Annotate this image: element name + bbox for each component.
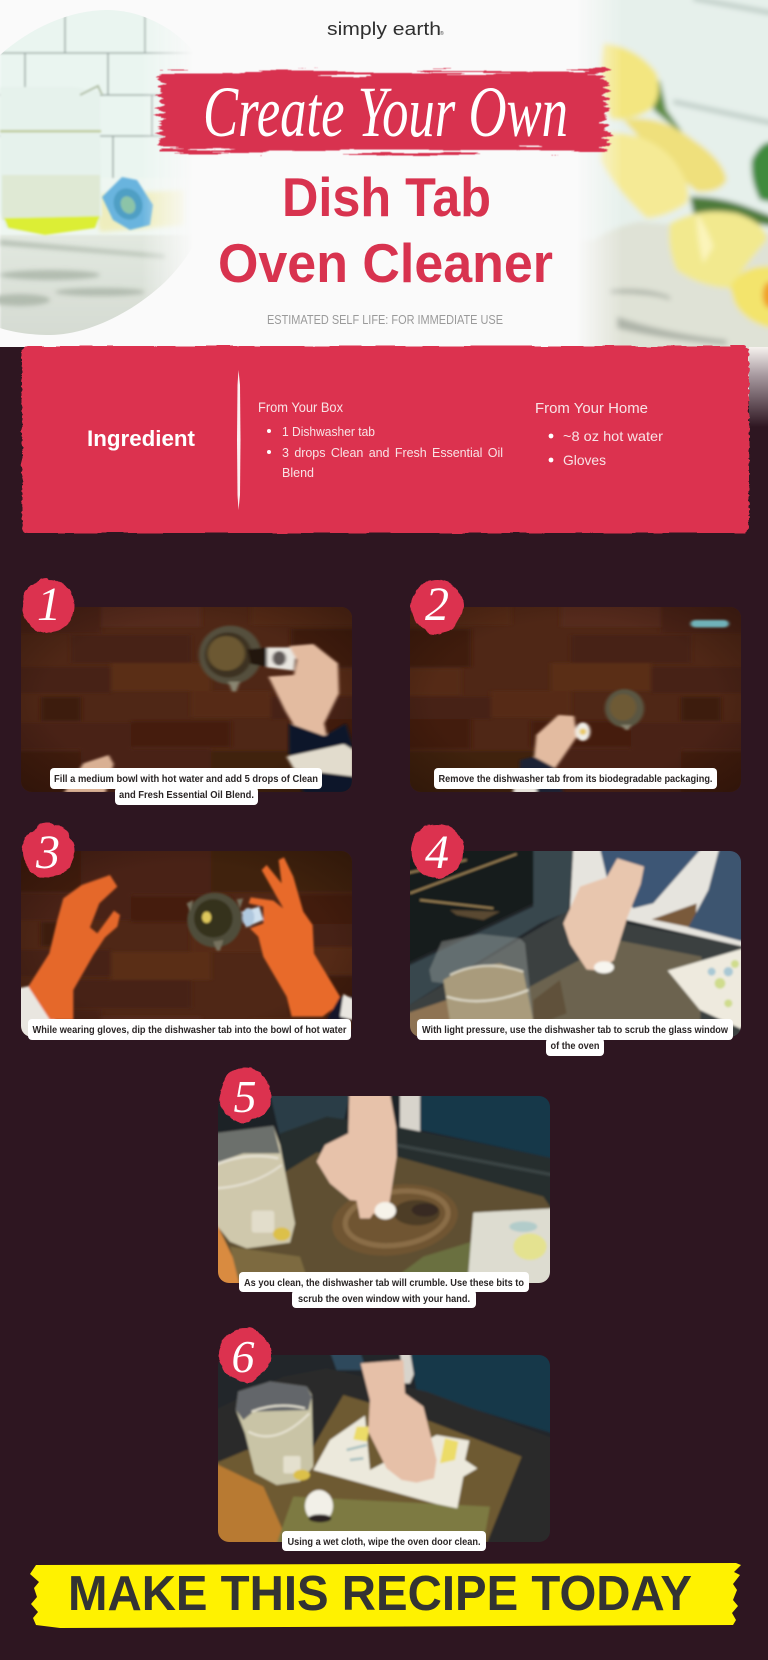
caption 5	[239, 1272, 529, 1308]
caption 4: With light pressure, use the dishwasher tab to scrub the glass window	[422, 1024, 729, 1036]
photo: wiping oven door	[215, 1352, 553, 1547]
photo: crumbled tab scrubbing	[215, 1093, 553, 1287]
brand logo: ®	[440, 30, 444, 37]
caption 1	[50, 768, 322, 805]
dish tab	[102, 177, 153, 230]
script heading: Create Your Own	[203, 72, 568, 152]
caption 5: As you clean, the dishwasher tab will crumble. Use these bits to	[244, 1277, 524, 1289]
heading: Dish Tab Oven Cleaner: Oven Cleaner	[218, 233, 553, 294]
brand logo: simply earth	[327, 19, 441, 39]
title banner: Create Your Own	[160, 72, 606, 152]
number badge 4: 4	[425, 826, 449, 879]
number badge 6	[219, 1328, 271, 1382]
caption 2	[434, 768, 717, 789]
list: from your home: From Your Home	[535, 400, 648, 417]
caption 1: Fill a medium bowl with hot water and add 5 drops of Clean	[54, 773, 318, 785]
shelf life note: ESTIMATED SELF LIFE: FOR IMMEDIATE USE	[267, 313, 503, 327]
photo: dipping tab with gloves	[21, 851, 352, 1036]
caption 3	[28, 1019, 351, 1040]
photo: adding oil to bowl	[21, 607, 352, 792]
caption 3: While wearing gloves, dip the dishwasher tab into the bowl of hot water	[32, 1024, 346, 1036]
number badge 5	[219, 1068, 271, 1122]
number badge 1: 1	[37, 578, 61, 631]
list: from your box	[258, 400, 503, 480]
panel: step 5	[215, 1068, 553, 1308]
list: from your box: 1 Dishwasher tab	[282, 425, 375, 439]
photo: removing tab from packaging	[410, 607, 741, 792]
panel: step 1	[11, 578, 363, 805]
list: from your box: Blend	[282, 466, 314, 480]
beaker	[0, 86, 102, 235]
panel: step 3	[11, 824, 363, 1046]
list: from your home	[535, 400, 663, 468]
call to action text: MAKE THIS RECIPE TODAY	[68, 1567, 692, 1621]
header: white banner with photos	[0, 0, 768, 427]
caption 4: of the oven	[550, 1040, 600, 1052]
fade strip under right photo	[749, 347, 768, 427]
number badge 4	[411, 824, 463, 879]
number badge 2	[411, 578, 463, 633]
panel: step 2	[410, 580, 741, 792]
panel: step 4	[407, 824, 743, 1056]
heading: Dish Tab Oven Cleaner	[218, 167, 553, 294]
caption 5: scrub the oven window with your hand.	[298, 1293, 470, 1305]
red brush stroke	[160, 72, 606, 152]
caption 2: Remove the dishwasher tab from its biodegradable packaging.	[438, 773, 713, 785]
heading: Dish Tab Oven Cleaner: Dish Tab	[282, 167, 491, 228]
number badge 3	[22, 824, 74, 879]
yellow torn band	[30, 1563, 741, 1628]
caption 4	[417, 1019, 733, 1056]
number badge 6: 6	[232, 1331, 254, 1382]
marble veins	[0, 240, 165, 306]
photo: beaker and dish tab on marble	[0, 10, 186, 335]
list: from your home: Gloves	[563, 452, 606, 468]
number badge 1	[22, 578, 74, 633]
number badge 5: 5	[234, 1071, 256, 1122]
vertical divider	[237, 370, 240, 510]
caption 1: and Fresh Essential Oil Blend.	[119, 789, 254, 801]
caption 6: Using a wet cloth, wipe the oven door clean.	[288, 1536, 481, 1548]
call to action banner	[30, 1563, 741, 1628]
photo: yellow roses	[587, 0, 768, 396]
number badge 3: 3	[35, 826, 60, 879]
list: from your home: ~8 oz hot water	[563, 428, 663, 444]
list: from your box: 3 drops Clean and Fresh Essential Oil	[282, 446, 503, 460]
caption 6	[282, 1531, 486, 1551]
ingredient label: Ingredient	[87, 426, 196, 451]
panel: ingredients	[22, 346, 749, 533]
list: from your box: From Your Box	[258, 400, 343, 415]
photo: scrubbing oven window	[407, 848, 743, 1040]
panel: step 6	[215, 1328, 553, 1551]
number badge 2: 2	[425, 578, 449, 631]
